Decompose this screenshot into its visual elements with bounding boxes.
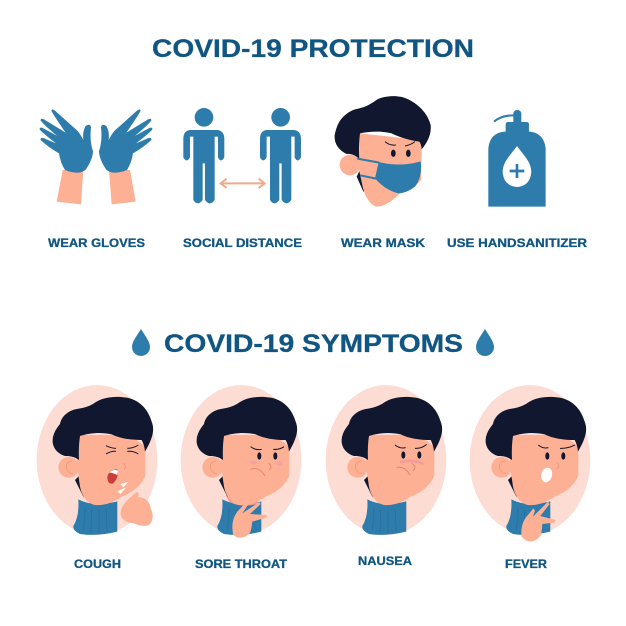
label: social distance: SOCIAL DISTANCE [183,236,302,250]
symptom: fever [470,385,590,541]
symptom: nausea [326,385,446,535]
label: sore throat: SORE THROAT [195,557,288,571]
icon: social distance [183,108,301,203]
label: wear mask: WEAR MASK [341,236,425,250]
label: fever: FEVER [505,557,547,571]
icon: right drop [476,329,494,356]
icon: gloves [40,109,152,204]
label: nausea: NAUSEA [358,554,412,568]
icon: face with mask [335,96,431,207]
title: protection: COVID-19 PROTECTION [152,35,474,63]
label: wear gloves: WEAR GLOVES [48,236,145,250]
title: symptoms: COVID-19 SYMPTOMS [164,330,463,358]
icon: left drop [132,329,150,356]
symptom: cough [37,385,157,535]
label: use handsanitizer: USE HANDSANITIZER [447,236,587,250]
icon: sanitizer bottle [488,110,546,207]
symptom: sore throat [181,385,301,538]
label: cough: COUGH [74,557,121,571]
